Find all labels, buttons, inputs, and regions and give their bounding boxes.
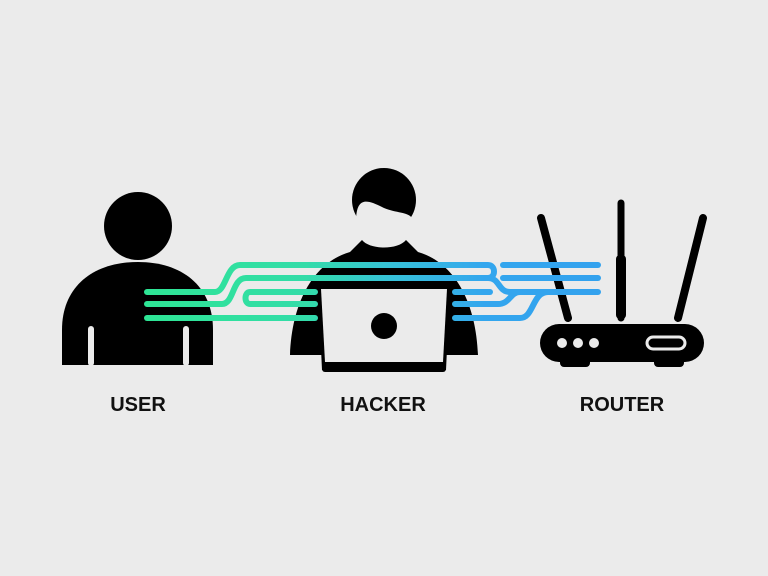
data lines [147, 265, 598, 318]
icon: hacker [290, 168, 478, 372]
icon: router [540, 203, 704, 367]
icon: user [62, 192, 213, 366]
label: router: ROUTER [580, 394, 665, 416]
label: hacker: HACKER [340, 394, 426, 416]
label: user: USER [110, 394, 166, 416]
